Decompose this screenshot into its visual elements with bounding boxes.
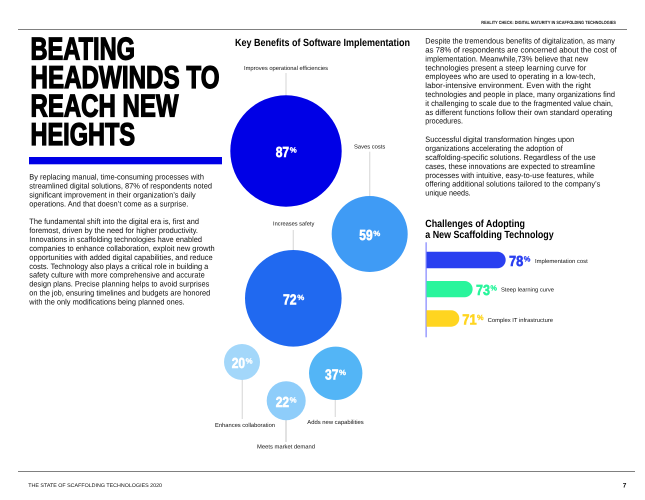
chart axis	[425, 242, 427, 337]
bubble: meets market demand 22%: Meets market demand	[257, 443, 315, 450]
bar: steep learning curve 73%	[426, 281, 554, 299]
bar: steep learning curve 73%: %	[490, 283, 497, 292]
text block: cost concerns paragraph: procedures.	[425, 117, 463, 126]
bubble: enhances collaboration 20%	[215, 344, 275, 429]
text block: digital transformation paragraph: offering additional solutions tailored to the company’s	[425, 180, 600, 189]
text block: intro paragraph: By replacing manual, time-consuming processes with	[29, 173, 204, 182]
bubble: enhances collaboration 20%: Enhances collaboration	[215, 422, 275, 429]
text block: intro paragraph	[29, 173, 212, 208]
text block: digital transformation paragraph: unique needs.	[425, 189, 471, 198]
footer title: THE STATE OF SCAFFOLDING TECHNOLOGIES 2020	[28, 483, 162, 489]
text block: fundamental shift paragraph: safety culture with more comprehensive and accurate	[29, 271, 205, 280]
bubble: adds new capabilities 37%	[307, 347, 364, 426]
text block: fundamental shift paragraph: on the job, ensuring timelines and budgets are honored	[29, 289, 210, 298]
page number: 7	[623, 482, 627, 489]
text block: fundamental shift paragraph: foremost, driven by the need for higher productivity.	[29, 226, 198, 235]
bar: complex IT infrastructure 71%: %	[477, 313, 484, 322]
bubble: enhances collaboration 20%: 20	[232, 356, 245, 372]
text block: fundamental shift paragraph: design plans. Precise planning helps to avoid surprises	[29, 280, 209, 289]
text block: cost concerns paragraph: as 78% of respondents are concerned about the cost of	[425, 46, 618, 54]
text block: fundamental shift paragraph	[28, 217, 215, 307]
title	[30, 31, 220, 152]
text block: digital transformation paragraph: processes with intuitive, easy-to-use features, while	[425, 171, 594, 180]
bubble: saves costs 59%	[332, 143, 408, 272]
bubble: increases safety 72%: 72	[283, 292, 297, 308]
bubble: adds new capabilities 37%: %	[339, 368, 346, 377]
bar: complex IT infrastructure 71%: Complex IT infrastructure	[488, 317, 553, 324]
bubble: improves operational efficiencies 87%: 87	[276, 145, 289, 161]
title accent bar	[29, 157, 222, 164]
bar: implementation cost 78%: Implementation cost	[535, 258, 588, 265]
bar: implementation cost 78%: 78	[509, 254, 523, 270]
text block: digital transformation paragraph: scaffolding-specific solutions. Regardless of the use	[425, 153, 596, 162]
text block: cost concerns paragraph: as different functions follow their own standard operating	[425, 108, 612, 117]
footer rule	[18, 471, 635, 472]
text block: fundamental shift paragraph: opportunities with added digital capabilities, and reduce	[29, 253, 213, 262]
bubble: saves costs 59%: %	[373, 229, 381, 238]
title: BEATING	[30, 31, 135, 67]
title: REACH NEW	[30, 88, 179, 124]
bubble: saves costs 59%: 59	[359, 228, 373, 244]
bubble: increases safety 72%: Increases safety	[273, 220, 314, 227]
bubble: enhances collaboration 20%: %	[246, 357, 253, 366]
bar chart: challenges	[425, 242, 588, 337]
title: HEADWINDS TO	[30, 59, 220, 95]
bubble: adds new capabilities 37%: Adds new capabilities	[307, 419, 364, 426]
text block: cost concerns paragraph: labor-intensive environment. Even with the right	[425, 81, 592, 90]
bubble: improves operational efficiencies 87%: Improves operational efficiencies	[244, 65, 328, 72]
text block: intro paragraph: significant improvement in their organization’s daily	[29, 190, 196, 200]
bar: steep learning curve 73%: Steep learning curve	[501, 286, 554, 293]
text block: fundamental shift paragraph: Innovations in scaffolding technologies have enabled	[29, 235, 202, 244]
text block: digital transformation paragraph	[425, 135, 600, 198]
bubble: improves operational efficiencies 87%: %	[290, 146, 297, 155]
text block: digital transformation paragraph: organizations accelerating the adoption of	[425, 144, 563, 153]
chart heading: challenges: Challenges of Adopting	[425, 219, 525, 230]
bubble: meets market demand 22%: 22	[276, 395, 289, 411]
text block: fundamental shift paragraph: with the only modifications being planned ones.	[28, 298, 185, 307]
text block: cost concerns paragraph: technologies present a steep learning curve for	[425, 63, 587, 72]
text block: cost concerns paragraph: implementation. Meanwhile,73% believe that new	[425, 54, 589, 63]
text block: fundamental shift paragraph: The fundamental shift into the digital era is, first and	[29, 217, 199, 226]
bubble chart: key benefits	[215, 65, 408, 450]
title: HEIGHTS	[30, 116, 135, 152]
bubble: meets market demand 22%	[257, 381, 315, 450]
bubble: increases safety 72%: %	[297, 293, 305, 302]
text block: cost concerns paragraph: technologies and people in place, many organizations find	[425, 90, 615, 99]
text block: digital transformation paragraph: Successful digital transformation hinges upon	[425, 135, 574, 144]
text block: cost concerns paragraph: employees who are used to operating in a low-tech,	[425, 72, 595, 81]
bubble: improves operational efficiencies 87%	[230, 65, 342, 207]
text block: digital transformation paragraph: cases, these innovations are expected to streamline	[425, 162, 595, 171]
bubble: saves costs 59%: Saves costs	[354, 143, 385, 150]
text block: cost concerns paragraph: it challenging to scale due to the fragmented value chain,	[425, 99, 613, 108]
text block: fundamental shift paragraph: costs. Technology also plays a critical role in building a	[29, 262, 209, 271]
bar: steep learning curve 73%: 73	[476, 283, 490, 299]
bar: complex IT infrastructure 71%	[426, 310, 553, 328]
bar: implementation cost 78%: %	[524, 254, 531, 263]
top rule	[18, 29, 627, 30]
bar: implementation cost 78%	[426, 252, 588, 270]
bubble: meets market demand 22%: %	[290, 396, 297, 405]
chart heading: challenges	[425, 219, 554, 241]
bubble: increases safety 72%	[245, 220, 342, 347]
running header: REALITY CHECK: DIGITAL MATURITY IN SCAFFOLDING TECHNOLOGIES	[481, 20, 616, 25]
bubble: adds new capabilities 37%: 37	[325, 368, 338, 384]
text block: cost concerns paragraph: Despite the tremendous benefits of digitalization, as many	[425, 37, 615, 46]
bar: complex IT infrastructure 71%: 71	[462, 312, 477, 328]
text block: cost concerns paragraph	[425, 37, 618, 126]
text block: intro paragraph: operations. And that doesn’t come as a surprise.	[29, 199, 188, 208]
text block: intro paragraph: streamlined digital solutions, 87% of respondents noted	[29, 182, 212, 190]
text block: fundamental shift paragraph: companies to enhance collaboration, exploit new growth	[29, 244, 215, 253]
chart heading: key benefits: Key Benefits of Software Implementation	[235, 38, 410, 49]
chart heading: challenges: a New Scaffolding Technology	[425, 230, 554, 241]
